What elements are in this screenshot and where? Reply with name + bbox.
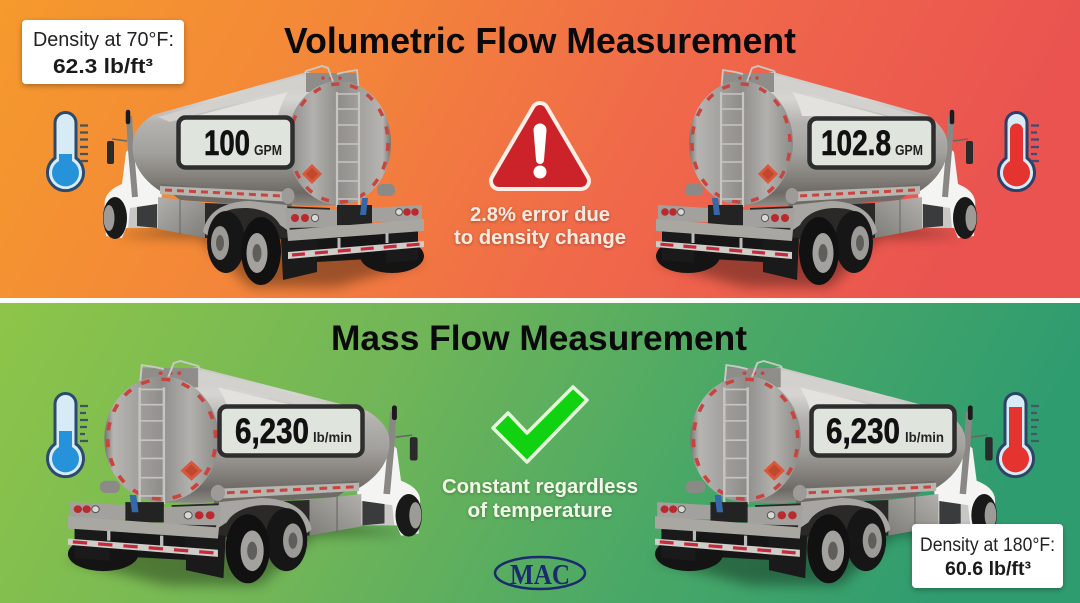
- logo: MAC: MAC: [510, 559, 570, 591]
- truck with mass flow display, 6,230 lb/min right: lb/min: [905, 429, 944, 445]
- heading: Volumetric Flow Measurement: Volumetric Flow Measurement: [284, 20, 796, 61]
- text: error note: to density change: [454, 227, 626, 249]
- text: constant note: of temperature: [468, 500, 612, 522]
- bottom panel background: mass flow: [0, 303, 1080, 603]
- text: constant note: [442, 476, 638, 522]
- truck with mass flow display, 6,230 lb/min left: lb/min: [313, 429, 352, 445]
- callout: density at 70F: 62.3 lb/ft³: [53, 56, 153, 78]
- callout: density at 180F: 60.6 lb/ft³: [945, 559, 1031, 580]
- truck with volumetric display, 102.8 GPM: GPM: [895, 143, 923, 159]
- callout: density at 180F: [912, 524, 1063, 588]
- icon: hot thermometer, bottom right: [998, 394, 1039, 477]
- divider band: [0, 298, 1080, 303]
- truck with volumetric display, 100 GPM: GPM: [254, 143, 282, 159]
- icon: green check mark: [493, 387, 587, 462]
- truck with mass flow display, 6,230 lb/min right: 6,230: [826, 412, 900, 451]
- truck with mass flow display, 6,230 lb/min left: [68, 361, 422, 585]
- truck with mass flow display, 6,230 lb/min right: [655, 361, 997, 585]
- text: error note: [454, 204, 626, 249]
- truck with volumetric display, 100 GPM: 100: [204, 124, 250, 163]
- callout: density at 70F: Density at 70°F:: [33, 29, 174, 51]
- text: constant note: Constant regardless: [442, 476, 638, 498]
- icon: cool thermometer, top left: [48, 112, 88, 191]
- callout: density at 180F: Density at 180°F:: [920, 535, 1055, 556]
- icon: cool thermometer, bottom left: [48, 394, 88, 477]
- top panel background: volumetric flow: [0, 0, 1080, 298]
- callout: density at 70F: [22, 20, 184, 84]
- truck with volumetric display, 102.8 GPM: [656, 66, 977, 287]
- truck with mass flow display, 6,230 lb/min left: 6,230: [235, 412, 309, 451]
- truck with volumetric display, 100 GPM: [103, 66, 424, 287]
- text: error note: 2.8% error due: [470, 204, 610, 226]
- icon: hot thermometer, top right: [999, 112, 1039, 191]
- heading: Mass Flow Measurement: Mass Flow Measurement: [331, 319, 747, 358]
- icon: warning triangle: [499, 111, 581, 181]
- truck with volumetric display, 102.8 GPM: 102.8: [821, 124, 891, 163]
